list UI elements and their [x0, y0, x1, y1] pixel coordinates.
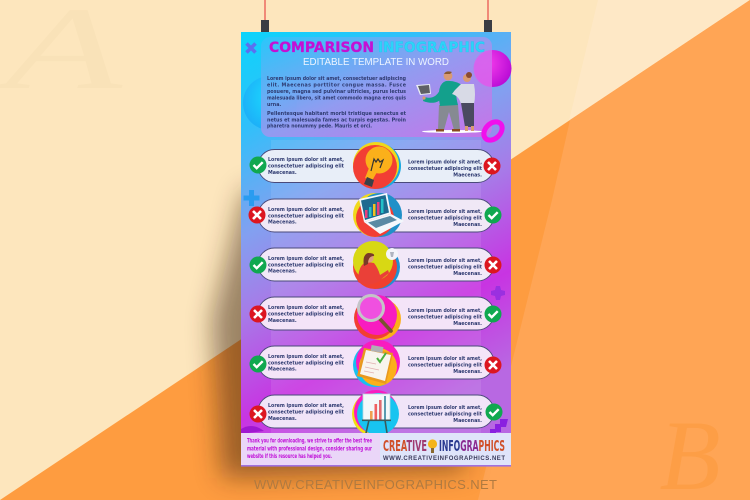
left text: Maecenas. — [268, 318, 297, 324]
icon: check — [486, 404, 502, 420]
logo url: WWW.CREATIVEINFOGRAPHICS.NET — [383, 456, 505, 462]
icon: cross — [484, 158, 500, 174]
right text — [408, 160, 483, 178]
left text: Lorem ipsum dolor sit amet, — [268, 256, 344, 262]
left text — [268, 157, 345, 176]
icon: cross — [250, 406, 266, 422]
title: INFOGRAPHIC — [378, 40, 485, 56]
right text — [408, 405, 483, 424]
decorative cross icon — [246, 44, 256, 52]
right text: Lorem ipsum dolor sit amet, — [408, 308, 482, 314]
intro text: Pellentesque habitant morbi tristique senectus et — [267, 111, 407, 117]
footer text: material with professional design, consider sharing our — [247, 444, 373, 452]
left text: Lorem ipsum dolor sit amet, — [268, 305, 344, 311]
left text — [268, 354, 345, 373]
icon: presentation chart — [352, 390, 399, 436]
icon: laptop — [353, 193, 404, 237]
right text: consectetuer adipiscing elit — [408, 166, 483, 172]
hanging clips and strings — [261, 0, 492, 36]
footer panel — [241, 433, 511, 467]
left text — [268, 403, 345, 422]
left text: Maecenas. — [268, 367, 297, 373]
pill — [258, 150, 494, 182]
intro text: elit. Maecenas porttitor congue massa. Fusce — [267, 83, 407, 89]
row 2 — [248, 193, 502, 237]
icon: check — [250, 356, 266, 372]
intro text: netus et malesuada fames ac turpis egestas. Proin — [267, 117, 407, 123]
intro text: Lorem ipsum dolor sit amet, consectetuer adipiscing — [267, 76, 407, 82]
decorative purple plus — [491, 286, 505, 300]
illustration: two people with laptop — [416, 71, 482, 133]
left text: Maecenas. — [268, 170, 297, 176]
intro text: posuere, magna sed pulvinar ultricies, purus lectus — [267, 89, 406, 95]
icon: cross — [250, 306, 266, 322]
icon: check — [250, 156, 266, 174]
decorative shape: magenta sphere overlap — [474, 50, 492, 87]
row 3 — [250, 241, 502, 289]
right text: Lorem ipsum dolor sit amet, — [408, 405, 482, 411]
intro text: pharetra nonummy pede. Mauris et orci. — [267, 124, 372, 130]
pill — [258, 297, 494, 330]
footer text — [247, 436, 373, 460]
left text — [268, 256, 345, 275]
right text: consectetuer adipiscing elit — [408, 216, 483, 222]
row 4 — [250, 295, 502, 340]
right text: consectetuer adipiscing elit — [408, 412, 483, 418]
poster background — [241, 32, 511, 466]
icon: woman with idea — [353, 241, 400, 289]
right text — [408, 308, 483, 327]
right text: Maecenas. — [453, 172, 482, 178]
right text: Maecenas. — [453, 321, 482, 327]
left text: consectetuer adipiscing elit — [268, 410, 345, 416]
decorative blue plus — [244, 190, 260, 206]
icon: check — [250, 256, 266, 274]
row 5 — [250, 340, 502, 387]
icon: check — [484, 306, 502, 322]
left text: Lorem ipsum dolor sit amet, — [268, 354, 344, 360]
right text — [408, 258, 483, 277]
left text: consectetuer adipiscing elit — [268, 164, 345, 170]
left text: Maecenas. — [268, 220, 297, 226]
intro text: malesuada libero, sit amet commodo magna eros quis — [267, 95, 406, 101]
row 6 — [250, 390, 502, 436]
poster shadow — [212, 190, 465, 478]
right text — [408, 209, 483, 228]
right text: consectetuer adipiscing elit — [408, 264, 483, 270]
icon: cross — [484, 256, 502, 274]
pill — [258, 395, 494, 428]
left text: Lorem ipsum dolor sit amet, — [268, 157, 344, 163]
right text: Lorem ipsum dolor sit amet, — [408, 356, 482, 362]
left text — [268, 305, 345, 324]
intro text — [267, 76, 407, 130]
decorative purple zigzag — [490, 419, 508, 436]
footer text: Thank you for downloading, we strive to offer the best free — [247, 436, 372, 444]
footer text: website if this resource has helped you. — [247, 452, 332, 460]
icon: clipboard — [353, 340, 400, 387]
right text: Maecenas. — [453, 271, 482, 277]
pill — [258, 199, 494, 232]
right text: Maecenas. — [453, 222, 482, 228]
left text: Maecenas. — [268, 269, 297, 275]
decorative purple swoosh — [241, 426, 264, 434]
right text: Lorem ipsum dolor sit amet, — [408, 258, 482, 264]
row 1 — [250, 142, 500, 189]
right text: Maecenas. — [453, 418, 482, 424]
icon: check — [484, 206, 502, 224]
logo: Creative: CREATIVE — [383, 437, 427, 455]
poster — [241, 32, 512, 467]
left text: consectetuer adipiscing elit — [268, 312, 345, 318]
decorative magenta ring — [480, 118, 506, 144]
icon: magnifying glass — [354, 295, 401, 340]
left text: Lorem ipsum dolor sit amet, — [268, 207, 344, 213]
title — [269, 40, 485, 56]
left text — [268, 207, 345, 226]
footer background — [241, 433, 511, 466]
pill — [258, 346, 494, 379]
right text: Lorem ipsum dolor sit amet, — [408, 160, 482, 166]
right text: Lorem ipsum dolor sit amet, — [408, 209, 482, 215]
logo: Infographics: INFOGRAPHICS — [439, 437, 505, 455]
icon: cross — [484, 356, 502, 374]
subtitle: EDITABLE TEMPLATE IN WORD — [303, 56, 449, 68]
right text: consectetuer adipiscing elit — [408, 314, 483, 320]
website caption: WWW.CREATIVEINFOGRAPHICS.NET — [254, 477, 497, 492]
left text: Lorem ipsum dolor sit amet, — [268, 403, 344, 409]
logo: bulb icon — [428, 439, 437, 453]
right text: Maecenas. — [453, 369, 482, 375]
header glass panel — [261, 37, 492, 137]
icon: cross — [248, 206, 266, 224]
title: COMPARISON — [269, 40, 374, 56]
right text: consectetuer adipiscing elit — [408, 362, 483, 368]
left text: consectetuer adipiscing elit — [268, 213, 345, 219]
icon: light bulb — [353, 142, 401, 189]
left text: consectetuer adipiscing elit — [268, 262, 345, 268]
left text: Maecenas. — [268, 416, 297, 422]
right text — [408, 356, 483, 375]
decorative shape: magenta sphere — [474, 50, 512, 87]
left text: consectetuer adipiscing elit — [268, 360, 345, 366]
intro text: urna. — [267, 102, 281, 108]
decorative shape: cyan sphere — [243, 78, 261, 128]
pill — [258, 248, 494, 281]
